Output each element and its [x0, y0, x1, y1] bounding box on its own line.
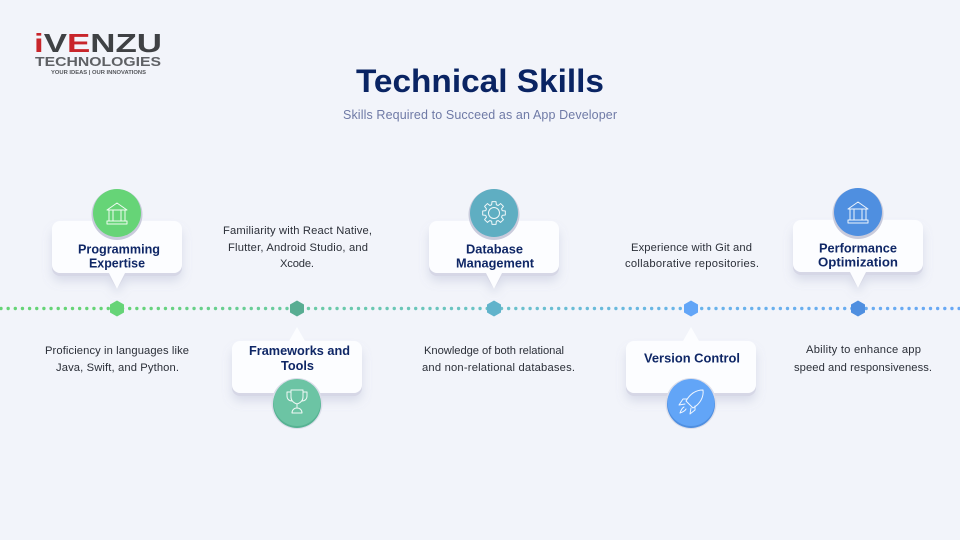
- timeline marker: [487, 300, 501, 316]
- timeline marker: [851, 300, 865, 316]
- icon circle: [666, 378, 716, 429]
- step 2: frameworks and tools: [223, 225, 372, 429]
- icon circle: [272, 378, 322, 429]
- step 1: programming expertise: [45, 189, 189, 374]
- description: Xcode.: [280, 258, 314, 270]
- description: and non-relational databases.: [422, 362, 575, 374]
- dotted timeline: [1, 307, 960, 310]
- icon circle: [92, 189, 142, 240]
- timeline marker: [684, 300, 698, 316]
- logo: iVENZU: [34, 28, 162, 58]
- icon circle: [832, 188, 884, 239]
- heading: Frameworks and: [249, 344, 350, 358]
- description: Familiarity with React Native,: [223, 225, 372, 237]
- description: Ability to enhance app: [806, 344, 921, 356]
- description: collaborative repositories.: [625, 258, 759, 270]
- description: Flutter, Android Studio, and: [228, 242, 368, 254]
- description: speed and responsiveness.: [794, 362, 932, 374]
- heading: Database: [466, 242, 523, 256]
- subtitle: Skills Required to Succeed as an App Developer: [343, 108, 617, 122]
- step 3: database management: [422, 189, 575, 374]
- callout card: [52, 221, 182, 289]
- callout card: [793, 220, 923, 288]
- heading: Optimization: [818, 256, 898, 270]
- step 4: version control: [625, 242, 759, 429]
- step 5: performance optimization: [793, 188, 932, 374]
- logo: [34, 28, 162, 76]
- timeline marker: [290, 300, 304, 316]
- description: Knowledge of both relational: [424, 345, 564, 357]
- heading: Expertise: [89, 256, 145, 270]
- title: Technical Skills: [356, 63, 604, 99]
- description: Java, Swift, and Python.: [56, 362, 179, 374]
- callout card: [232, 327, 362, 396]
- callout card: [626, 327, 756, 396]
- description: Proficiency in languages like: [45, 345, 189, 357]
- description: Experience with Git and: [631, 242, 752, 254]
- heading: Tools: [281, 359, 314, 373]
- logo: TECHNOLOGIES: [35, 54, 161, 69]
- heading: Management: [456, 256, 535, 270]
- timeline marker: [110, 300, 124, 316]
- heading: Version Control: [644, 352, 740, 366]
- callout card: [429, 221, 559, 289]
- heading: Performance: [819, 242, 897, 256]
- icon circle: [468, 189, 520, 240]
- heading: Programming: [78, 242, 160, 256]
- logo: YOUR IDEAS | OUR INNOVATIONS: [51, 70, 146, 76]
